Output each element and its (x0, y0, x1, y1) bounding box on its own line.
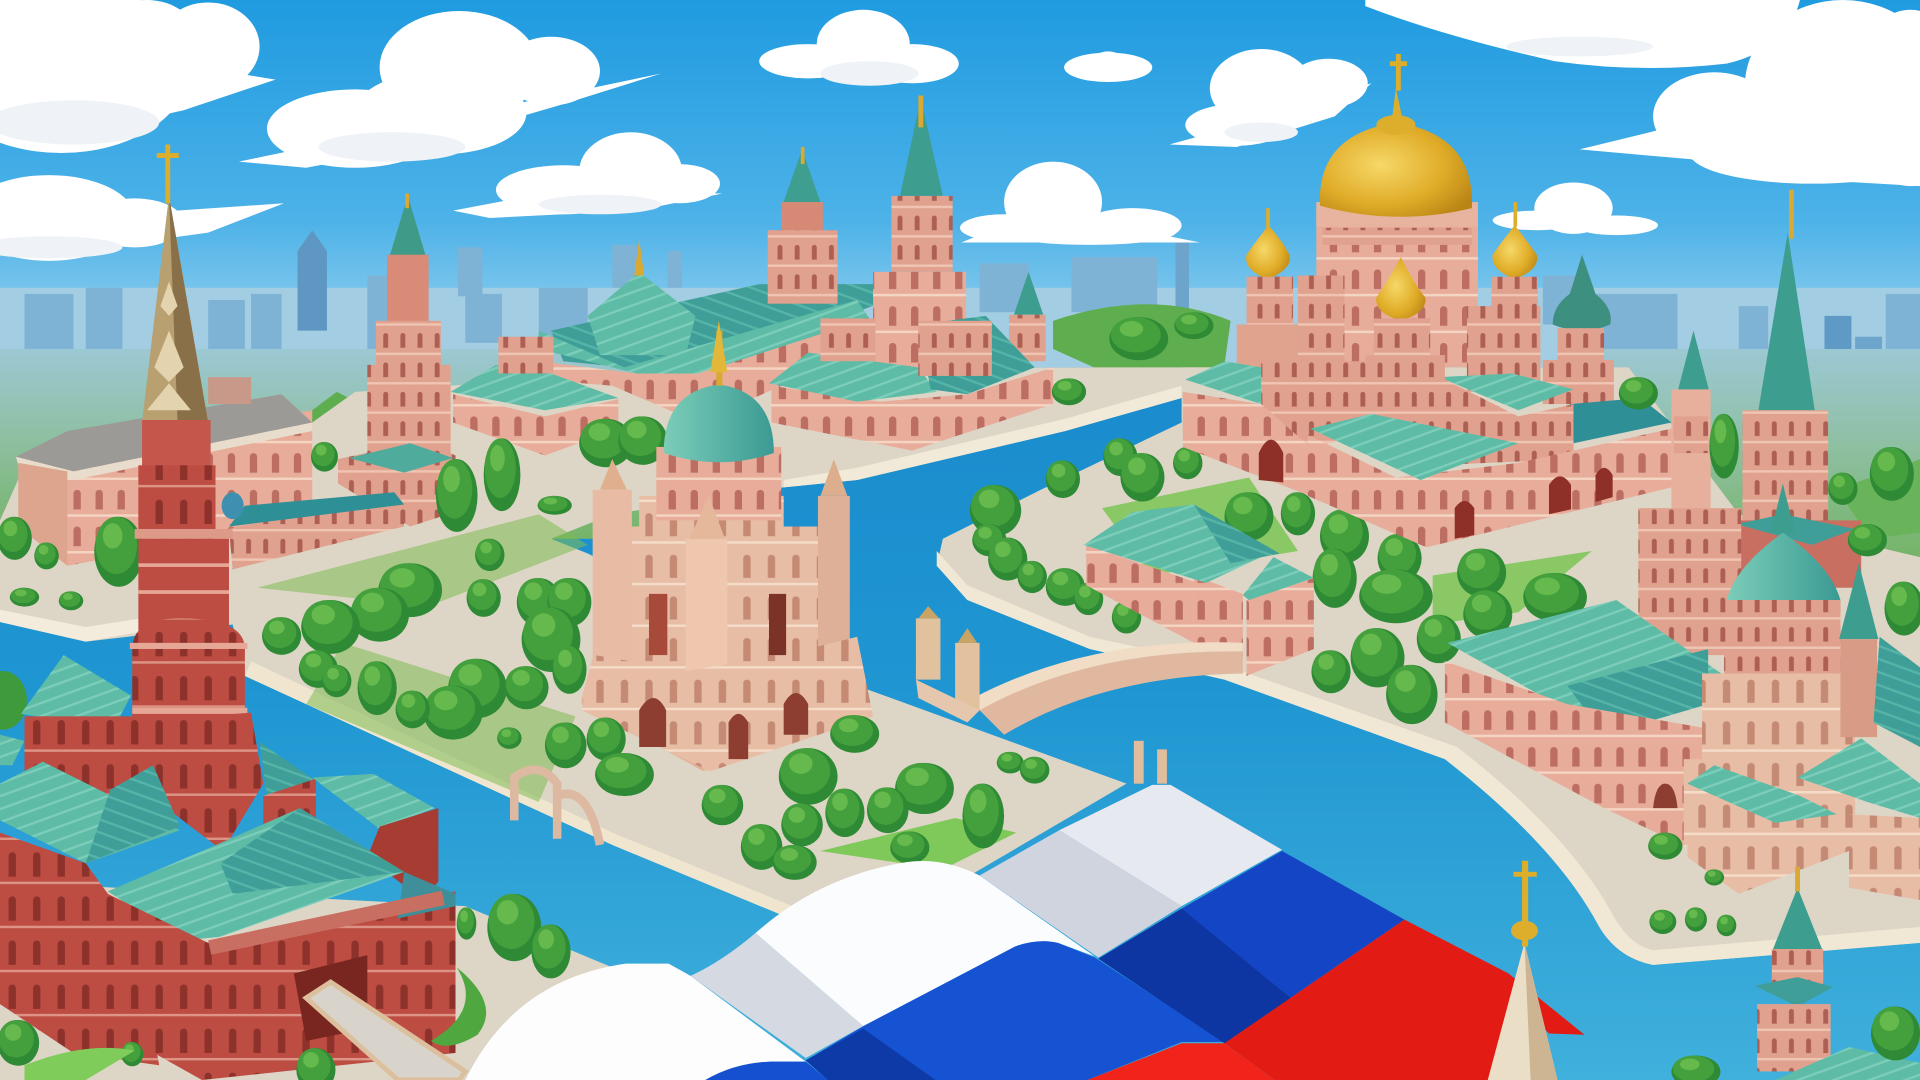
flag fold 2 white (756, 861, 1095, 1026)
cloud: right of centre (1169, 49, 1371, 147)
building: far-left wing with grey roof (16, 377, 312, 566)
flag fold 1 white (465, 964, 806, 1080)
flag fold 2 dark blue (806, 1029, 936, 1080)
bridge: causeway from palace gate (306, 982, 465, 1080)
land: north-west embankment and central park island (0, 367, 1224, 921)
trees: foreground corner (1671, 1007, 1920, 1080)
cloud: top-right band (1365, 0, 1800, 68)
flag: Russian tricolour (465, 785, 1584, 1080)
palace back wing right (260, 742, 316, 796)
building: foreground roof corner (1776, 1047, 1920, 1080)
cathedral west body (1183, 392, 1310, 496)
east main wall (1445, 661, 1708, 857)
palace rear roof (551, 284, 879, 373)
bridge: small stone arches (514, 770, 600, 845)
cloud: under the top-centre (453, 132, 722, 218)
cloud: small centre (1064, 51, 1152, 82)
river (0, 367, 1920, 1080)
bridge: arched river bridge (916, 606, 1243, 735)
land: south-west corner (0, 882, 612, 1080)
spire (142, 196, 208, 422)
flag fold 3 white (1059, 785, 1282, 906)
clouds (0, 0, 1920, 261)
flag red front (1087, 1043, 1275, 1080)
background: sky (0, 0, 1920, 367)
cloud: left lower (0, 175, 284, 261)
building: brick tower with green spire (338, 193, 456, 527)
east front wing (1687, 784, 1849, 894)
trees: east island (970, 438, 1587, 724)
palace left wall (0, 833, 159, 1065)
trees: east shore and edges (1619, 377, 1920, 936)
east mid tower (1638, 508, 1741, 655)
building: east palace (1445, 190, 1920, 900)
palace front (769, 316, 1053, 451)
east rear tower (1736, 190, 1861, 588)
palace left roof (21, 655, 131, 735)
building: red kremlin palace (0, 655, 456, 1080)
palace big left roof (0, 735, 180, 863)
cathedral arches (1259, 440, 1613, 539)
tower shaft (138, 539, 229, 631)
palace main tower (873, 96, 966, 370)
cloud: top centre (759, 10, 959, 86)
background: distant skyline (0, 230, 1920, 398)
palace west wing (451, 337, 618, 456)
east domed tower (1702, 484, 1855, 814)
trees: south park (545, 715, 1049, 880)
cathedral small gold domes (1246, 225, 1537, 321)
cloud: top-left (0, 0, 276, 153)
trees: around the red palace (0, 894, 571, 1080)
flag fold 2 blue (806, 941, 1224, 1080)
palace centre roof (108, 808, 404, 940)
slim tower on the cathedral east (1671, 331, 1711, 512)
background: distant greenery (0, 304, 1920, 557)
building: foreground golden spire (1488, 861, 1558, 1080)
cathedral main golden dome (1320, 122, 1472, 217)
cathedral front (1308, 429, 1671, 547)
cloud: centre lower (960, 162, 1200, 245)
cloud: behind the dome right (1493, 182, 1658, 235)
east main roofs (1447, 600, 1739, 735)
palace front walls (108, 891, 456, 1080)
palace rear tower (768, 147, 838, 304)
building: foreground small tower (1755, 867, 1833, 1071)
east side turret (1839, 563, 1878, 737)
flag fold 3 dark blue (1098, 909, 1298, 1043)
building: long palace (451, 96, 1053, 456)
cathedral finial (1376, 54, 1416, 135)
palace gate (294, 955, 367, 1041)
trees: central park (262, 563, 591, 749)
cathedral teal onion tower (1543, 255, 1614, 404)
building: small pavilion (1084, 504, 1314, 676)
cathedral side towers (1237, 276, 1540, 435)
flag fold 3 grey (980, 830, 1182, 958)
cloud: right large (1580, 0, 1920, 186)
cloud: upper-left large (239, 11, 661, 168)
flag fold 3 blue (1098, 851, 1404, 1043)
land: eastern embankment (937, 367, 1920, 965)
palace east tower (1009, 272, 1046, 361)
ornament: small columns by the flag (1134, 741, 1167, 784)
land: small green bank at west edge (0, 671, 27, 730)
building: central domed cathedral (582, 321, 873, 771)
flag fold 1 blue (705, 1062, 828, 1080)
cathedral roofs (1185, 361, 1261, 404)
flag red panel (1224, 920, 1584, 1080)
spire finial (157, 144, 179, 203)
trees: north embankment (0, 312, 1213, 610)
building: golden-domed cathedral (1183, 54, 1711, 547)
building: red spire tower (129, 144, 263, 851)
cathedral drum (1316, 208, 1478, 367)
flag grey fold strip (691, 933, 863, 1058)
building: low teal-roof wing beside the tower (222, 490, 404, 569)
palace hall (588, 272, 696, 355)
